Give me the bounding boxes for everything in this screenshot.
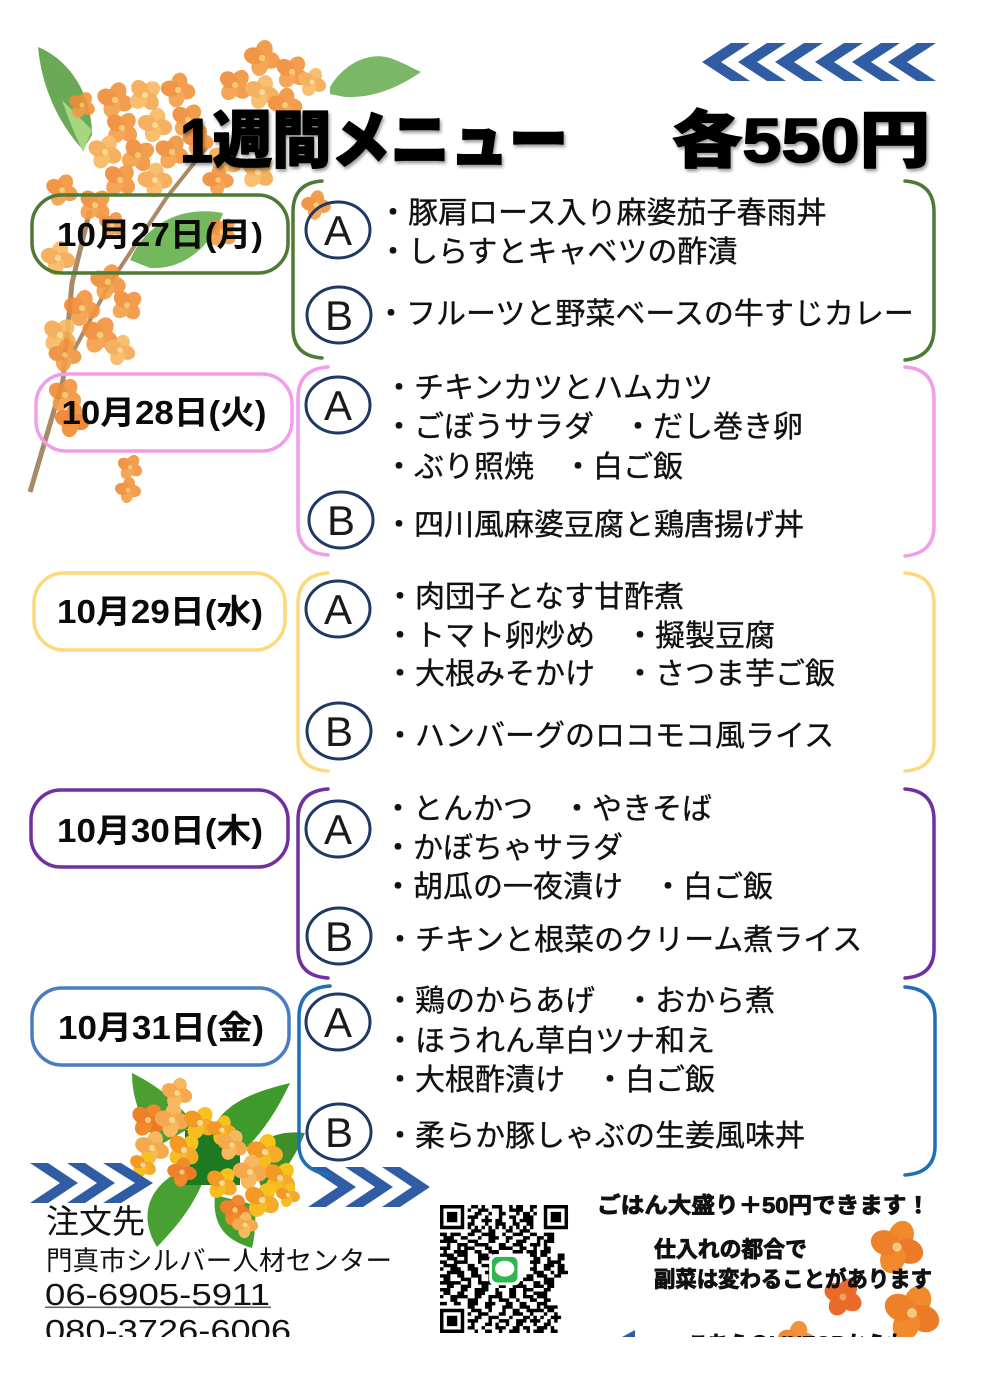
day panel: 10月30日: ・とんかつ — [383, 793, 533, 826]
day panel: 10月29日: ・肉団子となす甘酢煮 — [385, 581, 684, 614]
title — [180, 107, 930, 176]
illustration: osmanthus bouquet bottom — [124, 1073, 305, 1248]
day panel: 10月27日: ・フルーツと野菜ベースの牛すじカレー — [376, 298, 914, 331]
day panel: 10月31日 — [32, 985, 935, 1175]
title: 各550円 — [672, 107, 930, 176]
day panel: 10月29日: ・大根みそかけ — [385, 658, 595, 691]
day panel: 10月29日: ・ハンバーグのロコモコ風ライス — [385, 720, 834, 753]
day panel: 10月31日: ・柔らか豚しゃぶの生姜風味丼 — [385, 1120, 805, 1153]
day panel: 10月28日: ・だし巻き卵 — [623, 411, 803, 444]
order contact block — [45, 1203, 392, 1348]
day panel: 10月31日: B — [325, 1109, 353, 1156]
order contact block: 06-6905-5911 — [45, 1277, 270, 1312]
day panel: 10月27日: 10月27日(月) — [57, 216, 263, 253]
note: side dish changes: 副菜は変わることがあります — [654, 1267, 932, 1292]
day panel: 10月28日: ・チキンカツとハムカツ — [384, 372, 713, 405]
day panel: 10月30日: ・かぼちゃサラダ — [383, 832, 623, 865]
day panel: 10月29日: A — [324, 586, 352, 633]
illustration: osmanthus branch top left — [30, 35, 421, 505]
day panel: 10月30日: ・チキンと根菜のクリーム煮ライス — [385, 924, 862, 957]
day panel: 10月29日: 10月29日(水) — [57, 593, 263, 630]
illustration: orange flowers bottom right — [778, 1220, 940, 1337]
day panel: 10月27日: ・しらすとキャベツの酢漬 — [378, 236, 737, 269]
note: extra rice: ごはん大盛り＋50円できます！ — [597, 1193, 930, 1218]
decoration: bottom left chevrons — [30, 1163, 153, 1203]
decoration: top chevrons — [702, 43, 936, 81]
note: LINE call-out, cropped at the page edge: こちらのLINEQRからも — [688, 1332, 907, 1357]
day panel: 10月29日 — [34, 573, 934, 771]
day panel: 10月27日: A — [324, 207, 352, 254]
day panel: 10月30日: ・白ご飯 — [653, 871, 773, 904]
day panel: 10月27日 — [32, 181, 934, 360]
day panel: 10月28日 — [36, 367, 934, 556]
day panel: 10月29日: ・さつま芋ご飯 — [625, 658, 835, 691]
day panel: 10月30日: ・胡瓜の一夜漬け — [383, 871, 623, 904]
note: side dish changes — [654, 1237, 932, 1292]
LINE QR code — [440, 1207, 568, 1331]
day panel: 10月29日: ・擬製豆腐 — [625, 620, 775, 653]
day panel: 10月31日: ・大根酢漬け — [385, 1064, 565, 1097]
day panel: 10月28日: B — [327, 497, 355, 544]
day panel: 10月31日: ・ほうれん草白ツナ和え — [385, 1025, 715, 1058]
title: 1週間メニュー — [180, 107, 568, 176]
day panel: 10月27日: B — [325, 292, 353, 339]
day panel: 10月31日: ・鶏のからあげ — [385, 985, 595, 1018]
day panel: 10月28日: ・四川風麻婆豆腐と鶏唐揚げ丼 — [384, 509, 804, 542]
day panel: 10月31日: 10月31日(金) — [58, 1009, 264, 1046]
order contact block: 080-3726-6006 — [45, 1313, 291, 1348]
order contact block: 門真市シルバー人材センター — [46, 1246, 392, 1276]
day panel: 10月30日: B — [325, 913, 353, 960]
day panel: 10月28日: ・ぶり照焼 — [384, 451, 534, 484]
note: LINE call-out, cropped at the page edge — [622, 1330, 897, 1337]
note: side dish changes: 仕入れの都合で — [654, 1237, 807, 1262]
day panel: 10月27日: ・豚肩ロース入り麻婆茄子春雨丼 — [378, 197, 826, 230]
day panel: 10月31日: A — [324, 999, 352, 1046]
day panel: 10月30日: ・やきそば — [562, 793, 712, 826]
day panel: 10月28日: ・白ご飯 — [563, 451, 683, 484]
decoration: bottom right chevrons — [308, 1167, 430, 1207]
day panel: 10月28日: 10月28日(火) — [62, 394, 266, 431]
day panel: 10月29日: ・トマト卵炒め — [385, 620, 595, 653]
day panel: 10月30日 — [31, 789, 934, 978]
day panel: 10月28日: A — [324, 382, 352, 429]
day panel: 10月30日: 10月30日(木) — [57, 812, 263, 849]
day panel: 10月31日: ・白ご飯 — [595, 1064, 715, 1097]
order contact block: 注文先 — [46, 1203, 145, 1240]
day panel: 10月31日: ・おから煮 — [625, 985, 775, 1018]
day panel: 10月28日: ・ごぼうサラダ — [384, 411, 594, 444]
day panel: 10月30日: A — [324, 806, 352, 853]
day panel: 10月29日: B — [325, 708, 353, 755]
